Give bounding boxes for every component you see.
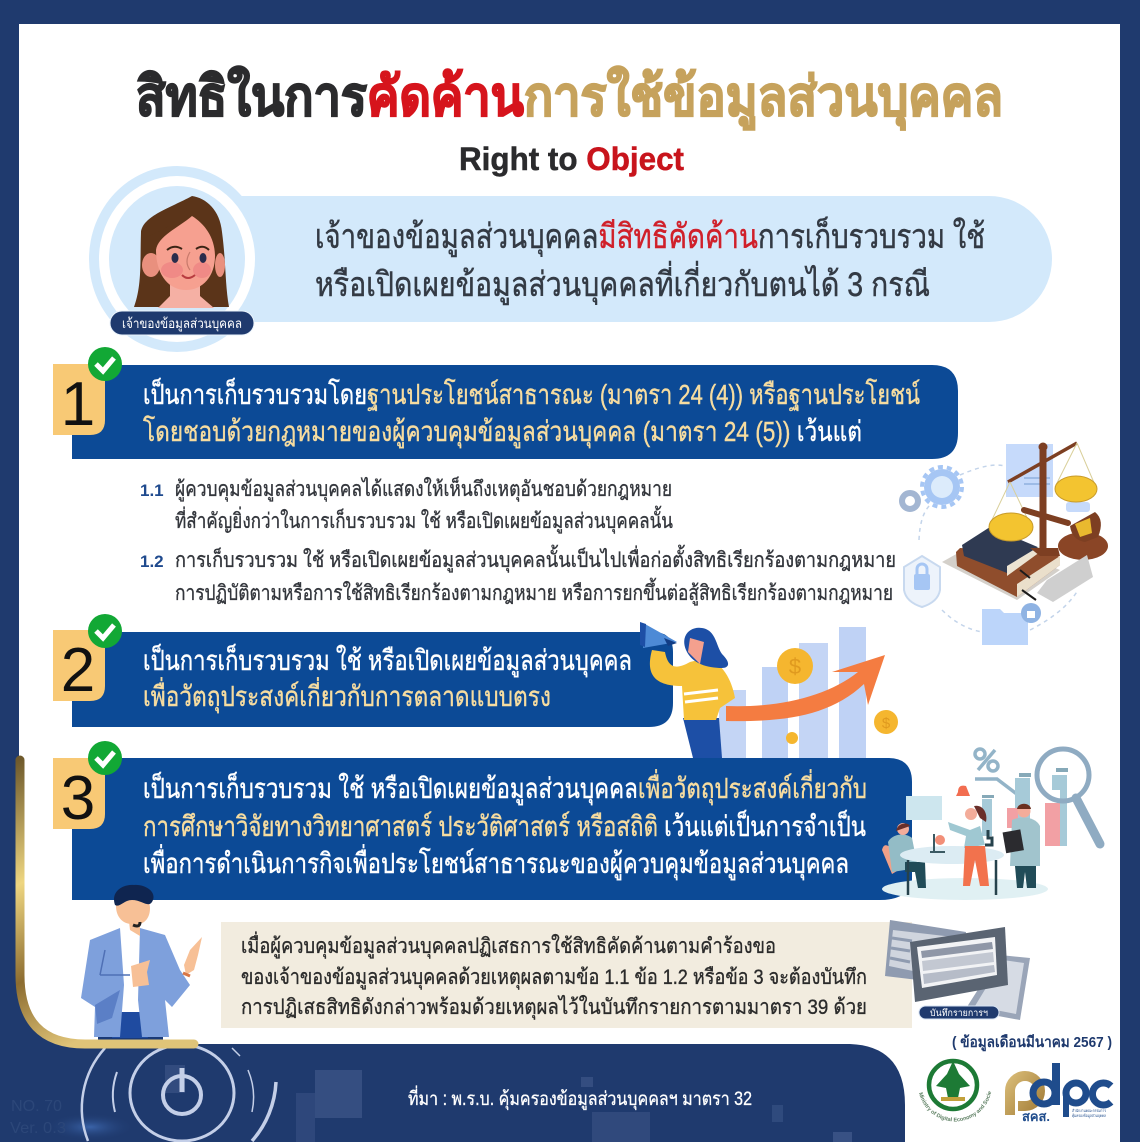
logo: pdpc: สคส.	[1022, 1109, 1050, 1124]
version note: NO. 70	[11, 1098, 62, 1115]
item 2 text: เพื่อวัตถุประสงค์เกี่ยวกับการตลาดแบบตรง	[143, 677, 551, 714]
item 2 text	[143, 643, 632, 714]
illustration: marketing woman with growth chart: $	[882, 715, 891, 732]
subtitle: Right to Object	[459, 141, 684, 177]
item 2 text: เป็นการเก็บรวบรวม ใช้ หรือเปิดเผยข้อมูลส่วนบุคคล	[143, 643, 632, 678]
footer band	[0, 980, 905, 1142]
title: สิทธิในการคัดค้านการใช้ข้อมูลส่วนบุคคล	[136, 65, 1003, 131]
item 3 number badge: 3	[61, 764, 95, 833]
item 2 number badge	[53, 630, 105, 705]
sub-items 1.1 and 1.2: การเก็บรวบรวม ใช้ หรือเปิดเผยข้อมูลส่วนบุคคลนั้นเป็นไปเพื่อก่อตั้งสิทธิเรียกร้องตามกฎหมาย	[175, 545, 896, 573]
illustration: marketing woman with growth chart: $	[789, 654, 801, 679]
owner label: เจ้าของข้อมูลส่วนบุคคล	[122, 316, 242, 332]
item 2 bar	[72, 632, 673, 727]
version note: Ver. 0.3	[10, 1120, 66, 1137]
note text: การปฏิเสธสิทธิดังกล่าวพร้อมด้วยเหตุผลไว้ในบันทึกรายการตามมาตรา 39 ด้วย	[241, 995, 867, 1020]
illustration: man pointing	[81, 885, 202, 1042]
item 1 number badge: 1	[61, 370, 95, 439]
item 2 number badge: 2	[61, 636, 95, 705]
data owner avatar	[89, 166, 265, 352]
item 3 text: เพื่อการดำเนินการกิจเพื่อประโยชน์สาธารณะของผู้ควบคุมข้อมูลส่วนบุคคล	[143, 844, 849, 881]
item 3 number badge	[53, 758, 105, 833]
sub-items 1.1 and 1.2: การปฏิบัติตามหรือการใช้สิทธิเรียกร้องตามกฎหมาย หรือการยกขึ้นต่อสู้สิทธิเรียกร้องตามกฎหมาย	[175, 578, 893, 606]
intro text: หรือเปิดเผยข้อมูลส่วนบุคคลที่เกี่ยวกับตนได้ 3 กรณี	[315, 261, 930, 305]
records label	[919, 1006, 999, 1019]
logo: pdpc: สำนักงานคณะกรรมการ	[1072, 1108, 1107, 1113]
note box	[221, 922, 912, 1028]
intro pill	[230, 196, 1052, 322]
gold corner stroke	[20, 760, 194, 1044]
sub-items 1.1 and 1.2: 1.1	[140, 481, 164, 500]
item 3 bar	[72, 758, 912, 900]
item 1 text: โดยชอบด้วยกฎหมายของผู้ควบคุมข้อมูลส่วนบุคคล (มาตรา 24 (5)) เว้นแต่	[143, 415, 862, 449]
sub-items 1.1 and 1.2: ผู้ควบคุมข้อมูลส่วนบุคคลได้แสดงให้เห็นถึงเหตุอันชอบด้วยกฎหมาย	[175, 475, 672, 502]
sub-items 1.1 and 1.2: ที่สำคัญยิ่งกว่าในการเก็บรวบรวม ใช้ หรือเปิดเผยข้อมูลส่วนบุคคลนั้น	[175, 506, 673, 534]
logo: pdpc	[1010, 1063, 1111, 1124]
logo: ministry emblem: Ministry of Digital Economy and Society	[919, 1091, 992, 1122]
logo: pdpc: คุ้มครองข้อมูลส่วนบุคคล	[1072, 1113, 1106, 1119]
item 1 text: เป็นการเก็บรวบรวมโดยฐานประโยชน์สาธารณะ (มาตรา 24 (4)) หรือฐานประโยชน์	[143, 377, 920, 411]
data date note: ( ข้อมูลเดือนมีนาคม 2567 )	[952, 1034, 1112, 1052]
illustration: marketing woman with growth chart	[640, 622, 898, 758]
version note	[10, 1098, 66, 1137]
item 1 bar	[72, 365, 958, 459]
note text: ของเจ้าของข้อมูลส่วนบุคคลด้วยเหตุผลตามข้อ 1.1 ข้อ 1.2 หรือข้อ 3 จะต้องบันทึก	[241, 966, 867, 990]
sub-items 1.1 and 1.2: 1.2	[140, 552, 164, 571]
sub-items 1.1 and 1.2	[140, 475, 896, 606]
records label: บันทึกรายการฯ	[930, 1008, 988, 1019]
power icon rings	[82, 1045, 276, 1141]
note text	[241, 931, 867, 1020]
illustration: scientists with charts	[882, 749, 1100, 900]
intro text: เจ้าของข้อมูลส่วนบุคคลมีสิทธิคัดค้านการเก็บรวบรวม ใช้	[315, 216, 985, 257]
illustration: law scales and books	[902, 442, 1108, 645]
illustration: record documents	[885, 920, 1030, 1020]
note text: เมื่อผู้ควบคุมข้อมูลส่วนบุคคลปฏิเสธการใช้สิทธิคัดค้านตามคำร้องขอ	[241, 931, 776, 959]
icon: check 3	[88, 741, 122, 775]
item 3 text: เป็นการเก็บรวบรวม ใช้ หรือเปิดเผยข้อมูลส่วนบุคคลเพื่อวัตถุประสงค์เกี่ยวกับ	[143, 769, 867, 806]
item 1 text	[143, 377, 920, 449]
item 3 text	[143, 769, 867, 881]
icon: check 1	[88, 347, 122, 381]
item 1 number badge	[53, 364, 105, 439]
icon: check 2	[88, 614, 122, 648]
item 3 text: การศึกษาวิจัยทางวิทยาศาสตร์ ประวัติศาสตร์ หรือสถิติ เว้นแต่เป็นการจำเป็น	[143, 809, 866, 842]
intro text	[315, 216, 985, 305]
owner label	[110, 311, 254, 335]
footer source text: ที่มา : พ.ร.บ. คุ้มครองข้อมูลส่วนบุคคลฯ มาตรา 32	[408, 1085, 752, 1111]
